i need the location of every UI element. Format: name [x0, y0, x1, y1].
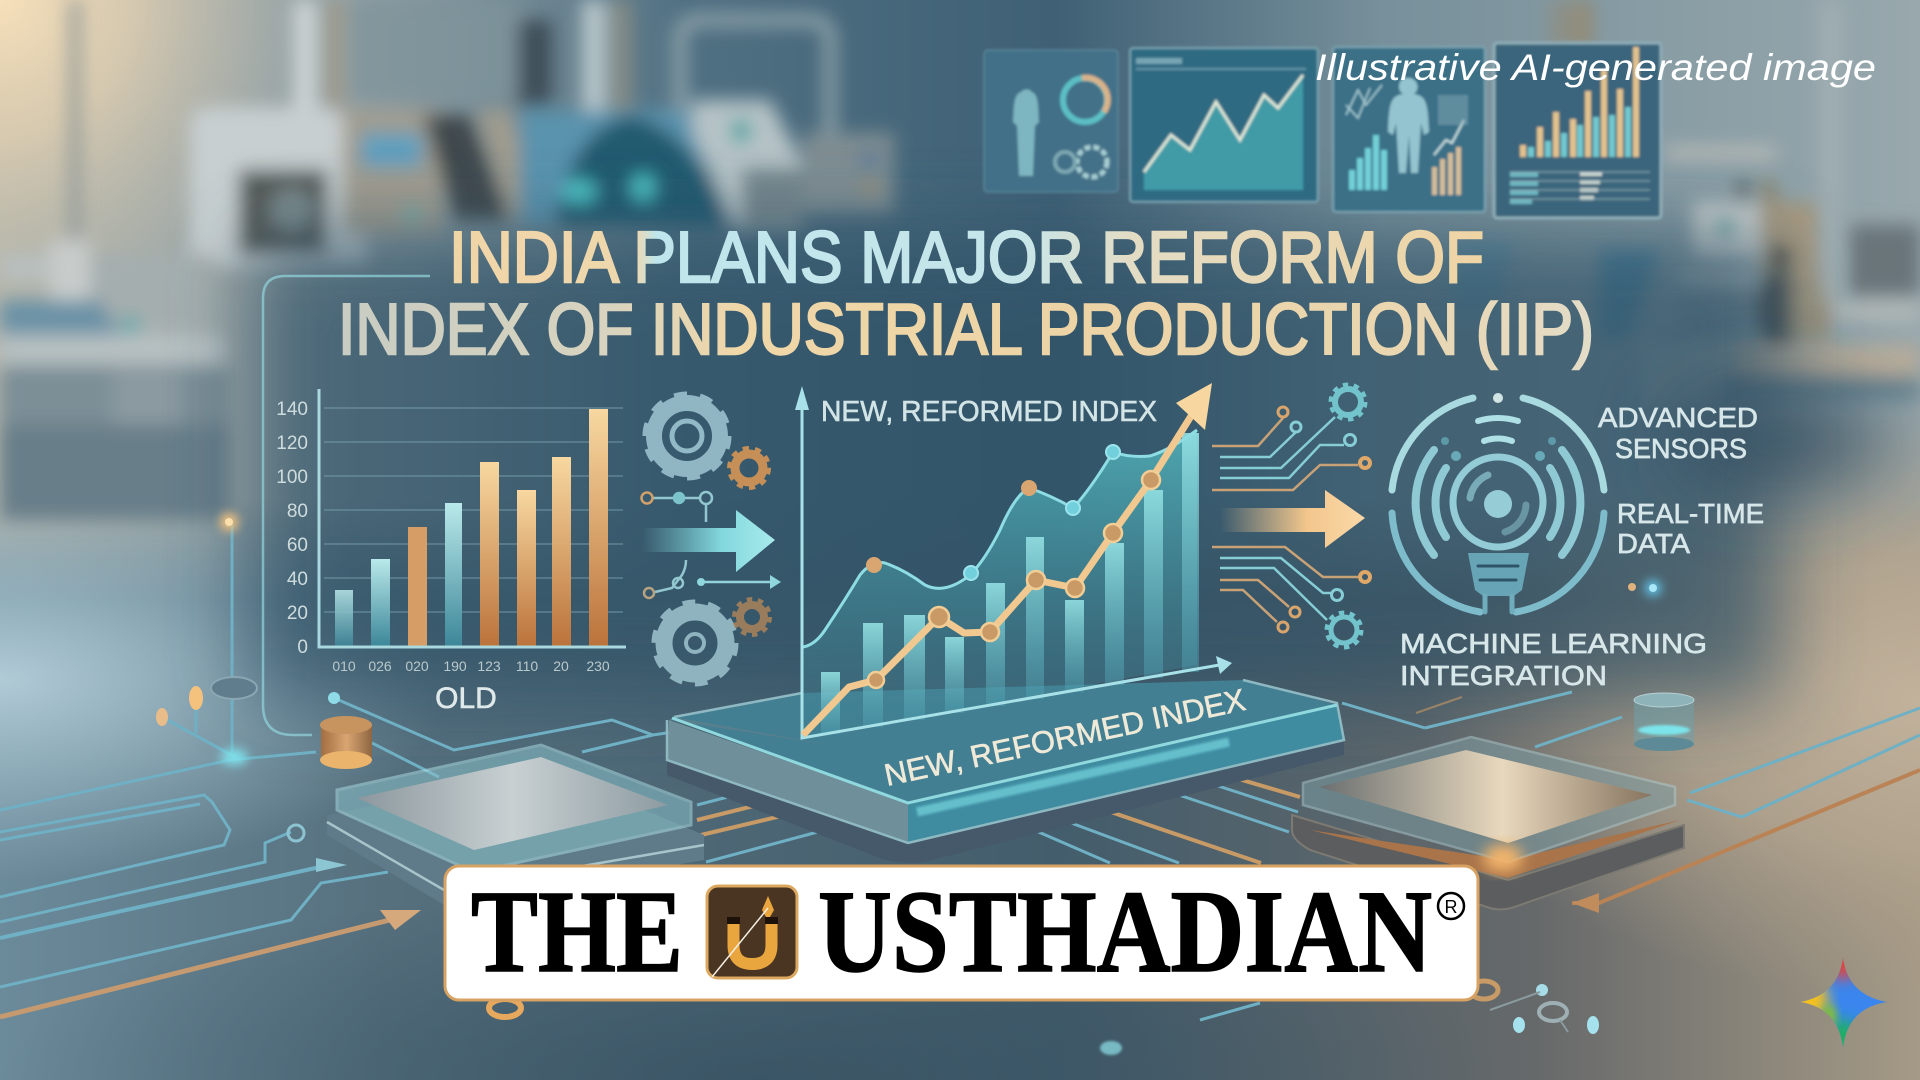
- arrow: orange: [1220, 490, 1365, 548]
- sensor icon: [1392, 393, 1604, 612]
- old chart x axis labels: 20: [553, 658, 569, 674]
- sensor labels: [1400, 402, 1764, 691]
- old chart x axis labels: [332, 658, 610, 674]
- icon: AI sparkle star: [1800, 958, 1887, 1047]
- registered mark: [1438, 893, 1464, 919]
- old chart x axis labels: 020: [405, 658, 429, 674]
- right machines: [1693, 203, 1763, 258]
- icon: U magnet and pen logo: [707, 886, 797, 978]
- old chart bars: [335, 409, 608, 646]
- top dashboard screens: [984, 43, 1661, 218]
- left bench: [0, 255, 135, 280]
- new reformed index chart: [795, 383, 1232, 738]
- panel outline around old chart: [263, 276, 430, 735]
- copper cylinder: [320, 716, 372, 769]
- icon: teal gear lower: [1327, 613, 1361, 647]
- logo banner: USTHADIAN: [818, 866, 1432, 997]
- icon: large gear bottom: [656, 604, 734, 682]
- small connector nodes bottom: [644, 560, 781, 598]
- old chart y axis labels: 60: [287, 535, 308, 556]
- icon: teal gear upper: [1331, 385, 1365, 419]
- old chart x axis labels: 230: [586, 658, 610, 674]
- logo banner: THE: [471, 866, 683, 997]
- old chart y axis labels: 140: [276, 399, 308, 420]
- old bar chart: OLD: [435, 682, 497, 715]
- icon: orange gear top: [730, 449, 768, 487]
- new reformed index chart: NEW, REFORMED INDEX: [821, 396, 1157, 428]
- dark glass haze behind title and charts: [250, 235, 1780, 700]
- title: INDEX OF INDUSTRIAL PRODUCTION (IIP): [338, 290, 1594, 370]
- old chart x axis labels: 123: [477, 658, 501, 674]
- orange line nodes: [868, 471, 1160, 688]
- orange growth line: [803, 405, 1198, 735]
- old chart y axis labels: 0: [297, 637, 308, 658]
- sensor labels: REAL-TIME: [1617, 498, 1764, 529]
- sensor labels: ADVANCED: [1598, 402, 1758, 433]
- wall stripes: [70, 0, 80, 280]
- sparkle dots: [1628, 580, 1661, 596]
- arrow: teal: [642, 510, 775, 572]
- old chart y axis labels: 100: [276, 467, 308, 488]
- machines: [190, 107, 368, 267]
- old chart x axis labels: 026: [368, 658, 392, 674]
- small connector nodes top: [642, 492, 712, 522]
- screen: paired bars: [1494, 43, 1661, 218]
- icon: large gear top: [647, 396, 727, 476]
- screen: line chart: [1130, 48, 1318, 202]
- small cluster of nodes: [1490, 984, 1599, 1034]
- circuit connectors to sensor: [1212, 385, 1370, 647]
- teal series nodes: [964, 445, 1120, 580]
- title: [338, 218, 1594, 370]
- arrow: growth head: [1176, 383, 1212, 430]
- glass cylinder: [1634, 693, 1694, 751]
- right glass plate: [1292, 737, 1684, 909]
- old chart x axis labels: 110: [516, 658, 538, 674]
- sensor labels: INTEGRATION: [1400, 660, 1607, 691]
- title: INDIA PLANS MAJOR REFORM OF: [449, 218, 1484, 298]
- teal area series: [803, 430, 1197, 738]
- old chart y axis labels: [276, 399, 308, 658]
- icon: orange gear bottom: [735, 600, 769, 634]
- left glass plate: [327, 745, 704, 905]
- arrow: table copper: [0, 910, 421, 1017]
- table glows and small nodes: [156, 513, 1694, 1055]
- chart axes: [802, 392, 1225, 738]
- screen: person and donut: [984, 50, 1118, 192]
- sensor labels: DATA: [1617, 528, 1690, 559]
- caption: Illustrative AI-generated image: [1315, 47, 1876, 88]
- angled plate label: NEW, REFORMED INDEX: [881, 682, 1249, 793]
- registered mark: R: [1444, 897, 1458, 917]
- screen: figure and bars: [1333, 47, 1485, 212]
- table circuit lines: [0, 524, 1920, 1020]
- sensor labels: SENSORS: [1615, 433, 1747, 464]
- old chart y axis labels: 120: [276, 433, 308, 454]
- logo banner: [445, 866, 1478, 1000]
- sensor labels: MACHINE LEARNING: [1400, 628, 1707, 659]
- old chart y axis labels: 40: [287, 569, 308, 590]
- old chart y axis labels: 20: [287, 603, 308, 624]
- old chart y axis labels: 80: [287, 501, 308, 522]
- central glass plate: [667, 680, 1344, 863]
- old chart x axis labels: 190: [443, 658, 467, 674]
- new chart bars: [821, 433, 1199, 734]
- old chart x axis labels: 010: [332, 658, 356, 674]
- old bar chart: [276, 389, 626, 715]
- icons and arrow between old and new charts: [642, 396, 781, 682]
